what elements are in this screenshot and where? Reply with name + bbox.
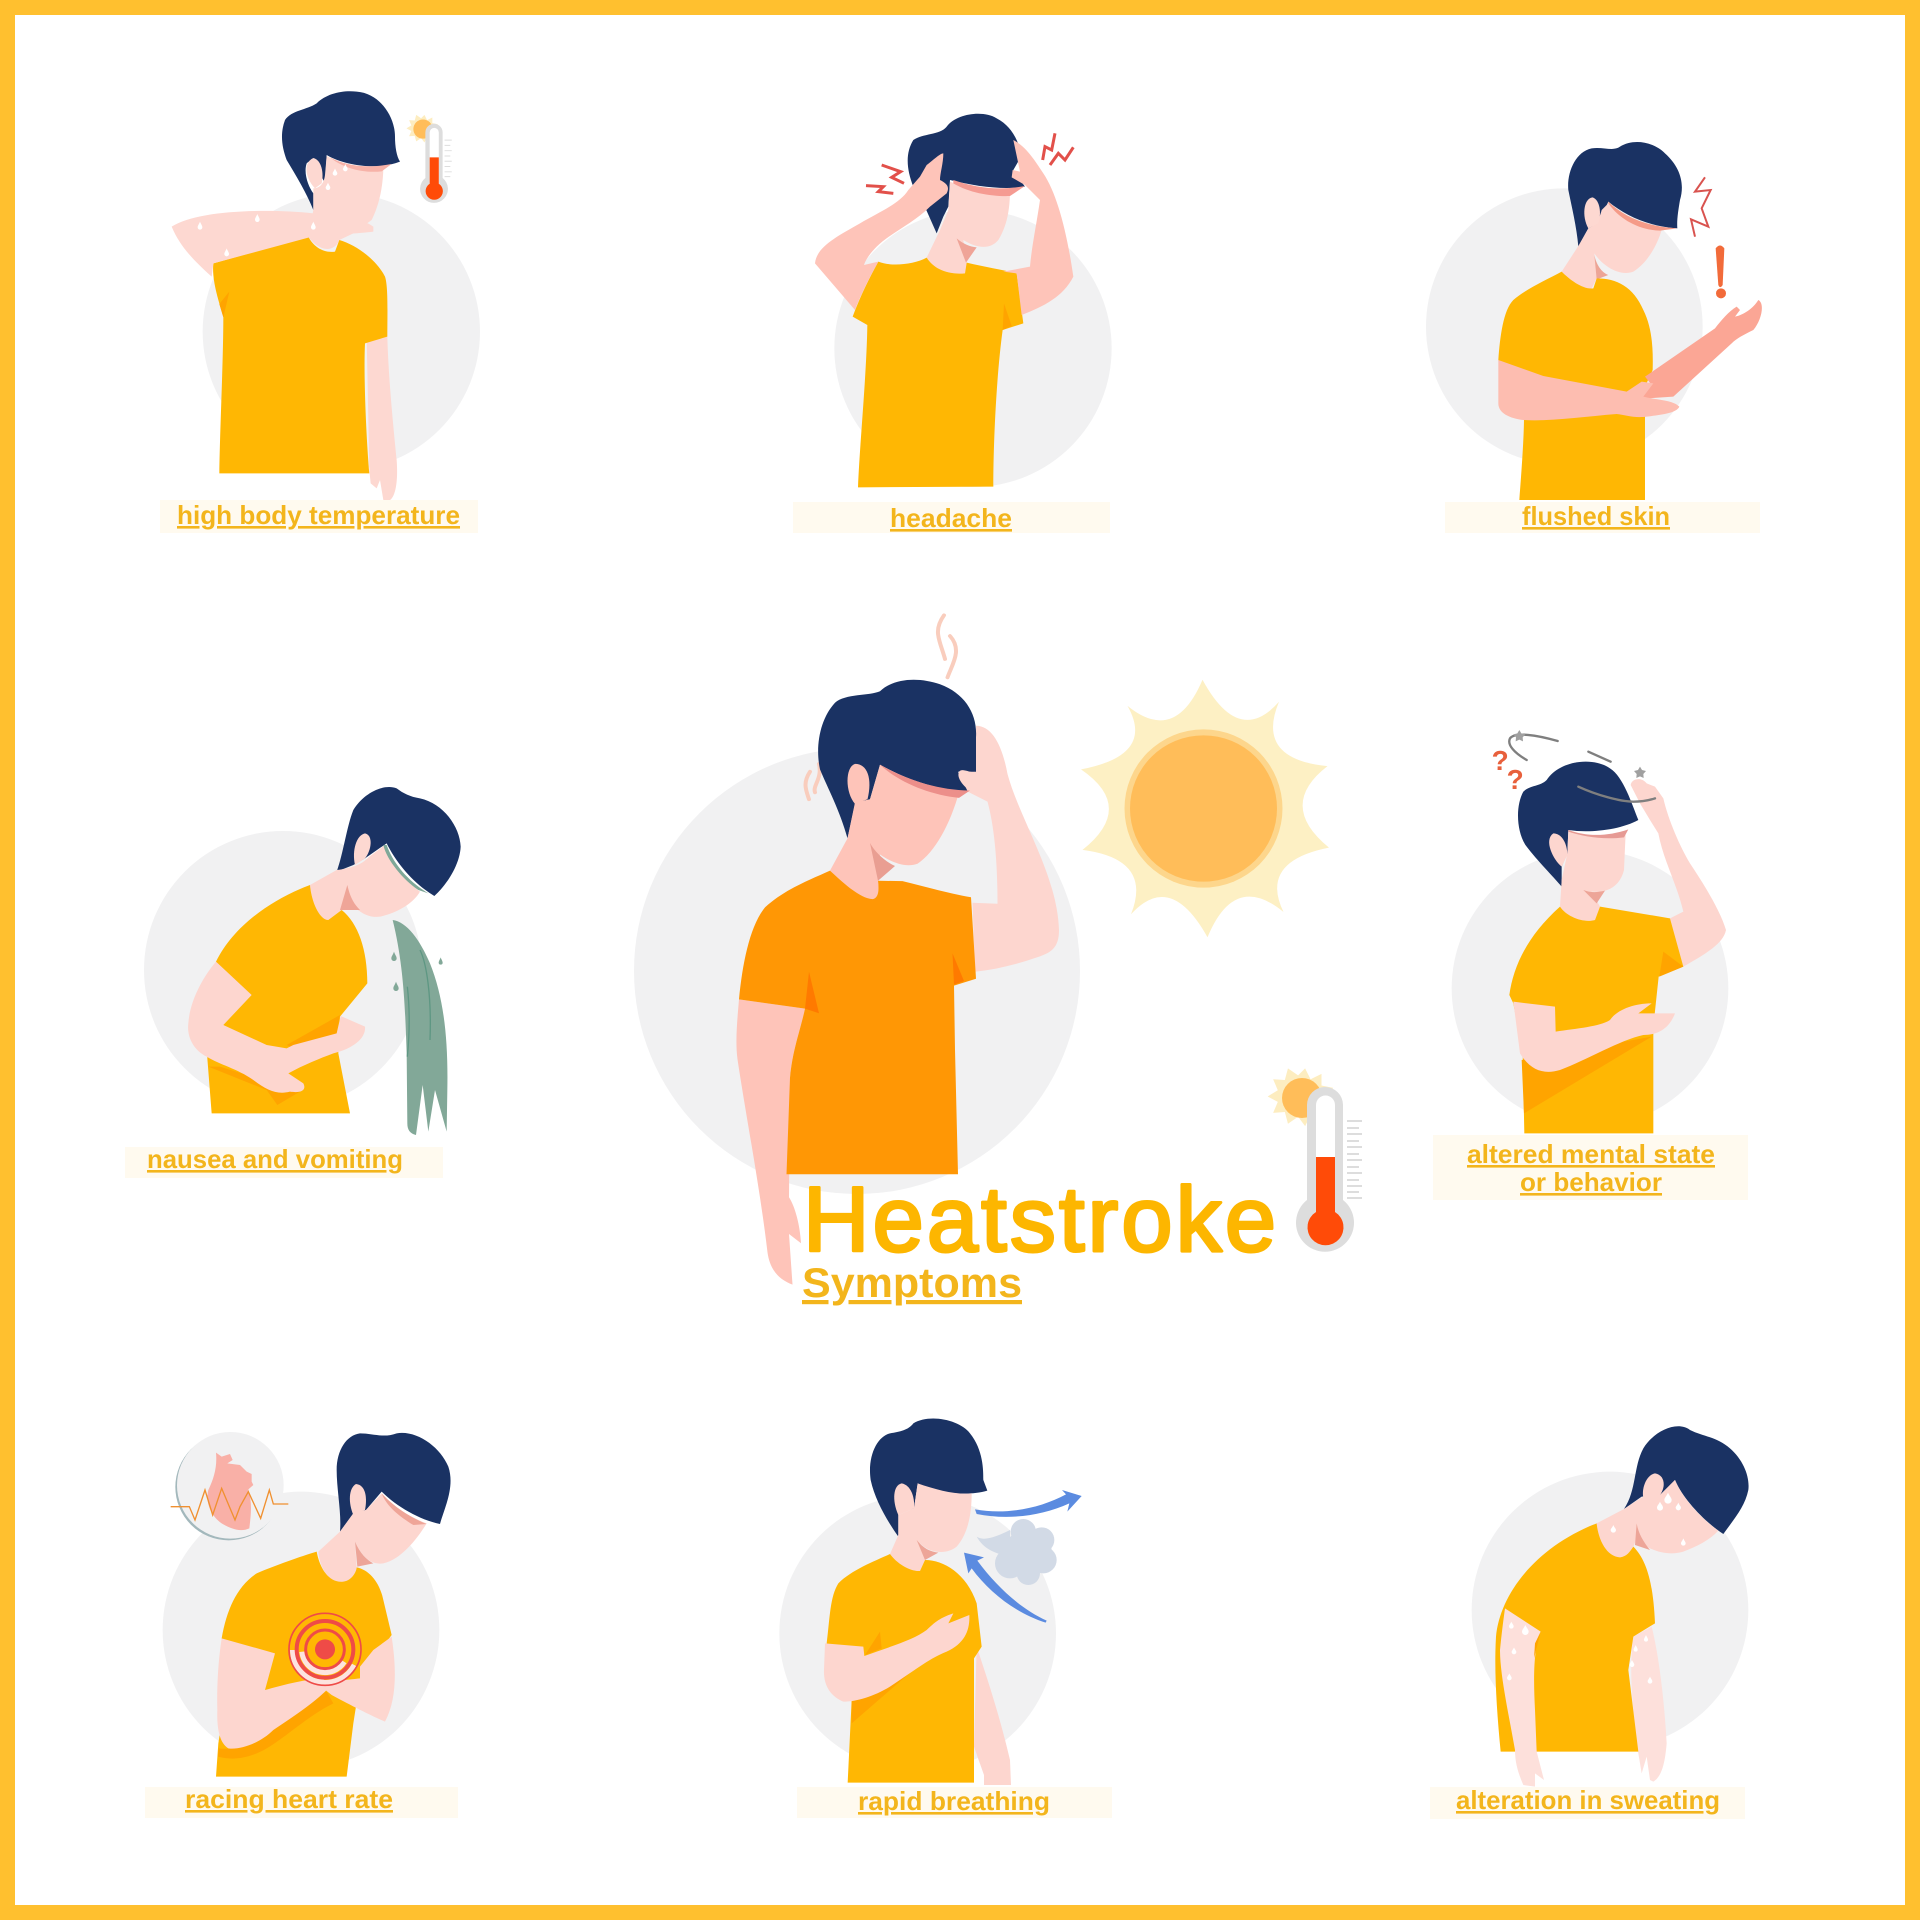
- icon: heart with ECG: [171, 1432, 288, 1540]
- backdrop circle: [779, 1495, 1056, 1772]
- ear: [1584, 197, 1600, 228]
- t-shirt: [1498, 272, 1653, 500]
- figure: man vomiting: [144, 787, 461, 1135]
- sweat drops: [1507, 1493, 1686, 1684]
- hanging arm: [367, 337, 397, 500]
- hair: [818, 680, 976, 838]
- green face tint: [383, 845, 428, 893]
- right arm: [1631, 1627, 1667, 1782]
- dizzy stars: [1513, 730, 1646, 778]
- neck shadow: [355, 1542, 373, 1567]
- sweat drops: [198, 164, 348, 256]
- left arm: [815, 153, 948, 310]
- left arm: [217, 1638, 327, 1749]
- forehead shadow: [382, 1493, 427, 1525]
- arm on stomach: [188, 962, 365, 1093]
- backdrop circle: [834, 210, 1112, 487]
- icon: thermometer with sun: [1268, 1068, 1362, 1252]
- hair: [1518, 762, 1638, 887]
- raised arm: [1631, 779, 1726, 967]
- inhale arrow: [964, 1553, 1047, 1623]
- label: altered mental state or behavior: or behavior: [1520, 1167, 1662, 1197]
- backdrop circle: [1426, 188, 1703, 465]
- figure: man holding head: [815, 114, 1112, 487]
- face and neck: [1560, 832, 1626, 921]
- panel: altered mental state or behavior: [1433, 730, 1748, 1200]
- pain target: [289, 1613, 361, 1685]
- neck shadow: [1635, 1523, 1650, 1550]
- label: altered mental state or behavior: [1433, 1135, 1748, 1200]
- face and neck: [310, 845, 420, 920]
- hair: [908, 114, 1025, 233]
- figure: man wiping forehead: [172, 91, 480, 500]
- question marks: [1492, 745, 1524, 795]
- label: alteration in sweating: alteration in sweating: [1456, 1785, 1720, 1815]
- sleeve shade: [1534, 1632, 1541, 1658]
- right arm: [323, 1637, 395, 1722]
- face and neck: [1562, 203, 1662, 289]
- red forearm: [1642, 300, 1762, 398]
- t-shirt: [739, 871, 976, 1174]
- t-shirt: [1509, 907, 1683, 1133]
- label: racing heart rate: [145, 1784, 458, 1818]
- forehead shadow: [1608, 202, 1677, 231]
- backdrop circle: [203, 193, 480, 470]
- face and neck: [830, 765, 959, 899]
- icon: thermometer with sun: [406, 115, 452, 203]
- vomit stream: [393, 920, 447, 1135]
- droplets: [391, 952, 443, 991]
- hair: [1624, 1426, 1749, 1534]
- neck shadow: [1594, 255, 1608, 279]
- ear: [306, 158, 323, 188]
- neck shadow: [917, 1540, 938, 1560]
- face and neck: [308, 156, 383, 249]
- sleeve shade: [219, 292, 229, 317]
- t-shirt: [1495, 1523, 1655, 1752]
- face and neck: [318, 1493, 427, 1582]
- zigzag mark: [1691, 177, 1711, 237]
- arm on chest: [824, 1613, 969, 1702]
- label: rapid breathing: [797, 1786, 1112, 1818]
- ear: [1549, 833, 1567, 867]
- panel: nausea and vomiting: [125, 787, 461, 1178]
- face and neck: [1597, 1480, 1718, 1557]
- exclamation mark: [1716, 245, 1726, 298]
- t-shirt: [827, 1554, 982, 1783]
- dizzy orbit: [1509, 735, 1655, 802]
- neck shadow: [957, 238, 977, 263]
- face and neck: [927, 182, 1010, 274]
- left arm: [1500, 1608, 1544, 1787]
- label: racing heart rate: racing heart rate: [185, 1784, 393, 1814]
- hair: [282, 91, 400, 210]
- figure: sweating man: [1472, 1426, 1749, 1787]
- hair: [337, 787, 461, 896]
- raised arm: [172, 211, 373, 277]
- panel: central heatstroke hero: [634, 615, 1362, 1306]
- hanging arm: [974, 1647, 1011, 1785]
- t-shirt: [207, 885, 367, 1113]
- raised arm: [959, 726, 1059, 972]
- label: rapid breathing: rapid breathing: [858, 1786, 1050, 1816]
- t-shirt: [853, 258, 1023, 487]
- panel: rapid breathing: [779, 1419, 1112, 1818]
- backdrop circle: [163, 1492, 439, 1768]
- t-shirt: [216, 1552, 392, 1777]
- label: altered mental state or behavior: altered mental state: [1467, 1139, 1715, 1169]
- hanging arm: [736, 999, 805, 1285]
- shirt shade: [218, 1692, 333, 1759]
- figure: man looking at red arm: [1426, 142, 1762, 500]
- backdrop circle: [634, 748, 1080, 1194]
- breath cloud: [977, 1519, 1057, 1585]
- lower arm: [1513, 1002, 1675, 1072]
- pain marks: [866, 133, 1073, 193]
- neck shadow: [1583, 890, 1605, 903]
- forehead shadow: [330, 157, 392, 172]
- subtitle: Symptoms: [802, 1259, 1022, 1306]
- backdrop circle: [144, 831, 422, 1109]
- question marks: ?: [1492, 745, 1509, 776]
- forehead shadow: [1568, 829, 1628, 838]
- label: nausea and vomiting: nausea and vomiting: [147, 1144, 403, 1174]
- label: high body temperature: high body temperature: [177, 500, 460, 530]
- backdrop circle: [1472, 1472, 1748, 1748]
- shirt shade: [1522, 952, 1683, 1113]
- ear: [354, 833, 371, 865]
- title: Heatstroke: [803, 1169, 1276, 1271]
- neck shadow: [340, 885, 360, 910]
- crossing arm: [1498, 360, 1679, 420]
- hair: [1568, 142, 1682, 247]
- neck shadow: [870, 843, 895, 881]
- shirt shade: [852, 1632, 927, 1723]
- shirt shade: [208, 1015, 340, 1105]
- fingers: [958, 769, 1008, 802]
- face and neck: [890, 1483, 972, 1571]
- panel: alteration in sweating: [1430, 1426, 1749, 1819]
- right arm: [1003, 140, 1073, 315]
- figure: man with hand on forehead: [736, 680, 1059, 1285]
- hair: [337, 1433, 451, 1532]
- panel: headache: [793, 114, 1112, 533]
- label: flushed skin: [1445, 501, 1760, 533]
- backdrop circle: [1452, 850, 1728, 1127]
- figure: dizzy man: [1452, 730, 1728, 1133]
- figure: man holding chest: [163, 1433, 451, 1777]
- forehead shadow: [953, 180, 1025, 196]
- ear: [848, 764, 869, 804]
- t-shirt: [213, 237, 387, 473]
- sleeve shade: [805, 953, 964, 1013]
- panel: high body temperature: [160, 91, 480, 533]
- sleeve shade: [1003, 303, 1012, 330]
- figure: man breathing fast: [779, 1419, 1082, 1785]
- stream highlights: [407, 950, 430, 1057]
- ear: [1643, 1473, 1664, 1505]
- panel: flushed skin: [1426, 142, 1762, 533]
- heat steam: [806, 615, 956, 799]
- panel: racing heart rate: [145, 1432, 458, 1818]
- exhale arrow: [975, 1490, 1082, 1517]
- icon: sun: [1081, 680, 1329, 937]
- ear: [350, 1484, 366, 1515]
- question marks: ?: [1507, 764, 1524, 795]
- label: headache: [793, 502, 1110, 533]
- forehead shadow: [880, 765, 970, 798]
- label: flushed skin: flushed skin: [1522, 501, 1670, 531]
- label: headache: headache: [890, 503, 1012, 533]
- ear: [894, 1483, 914, 1515]
- hair: [870, 1419, 987, 1537]
